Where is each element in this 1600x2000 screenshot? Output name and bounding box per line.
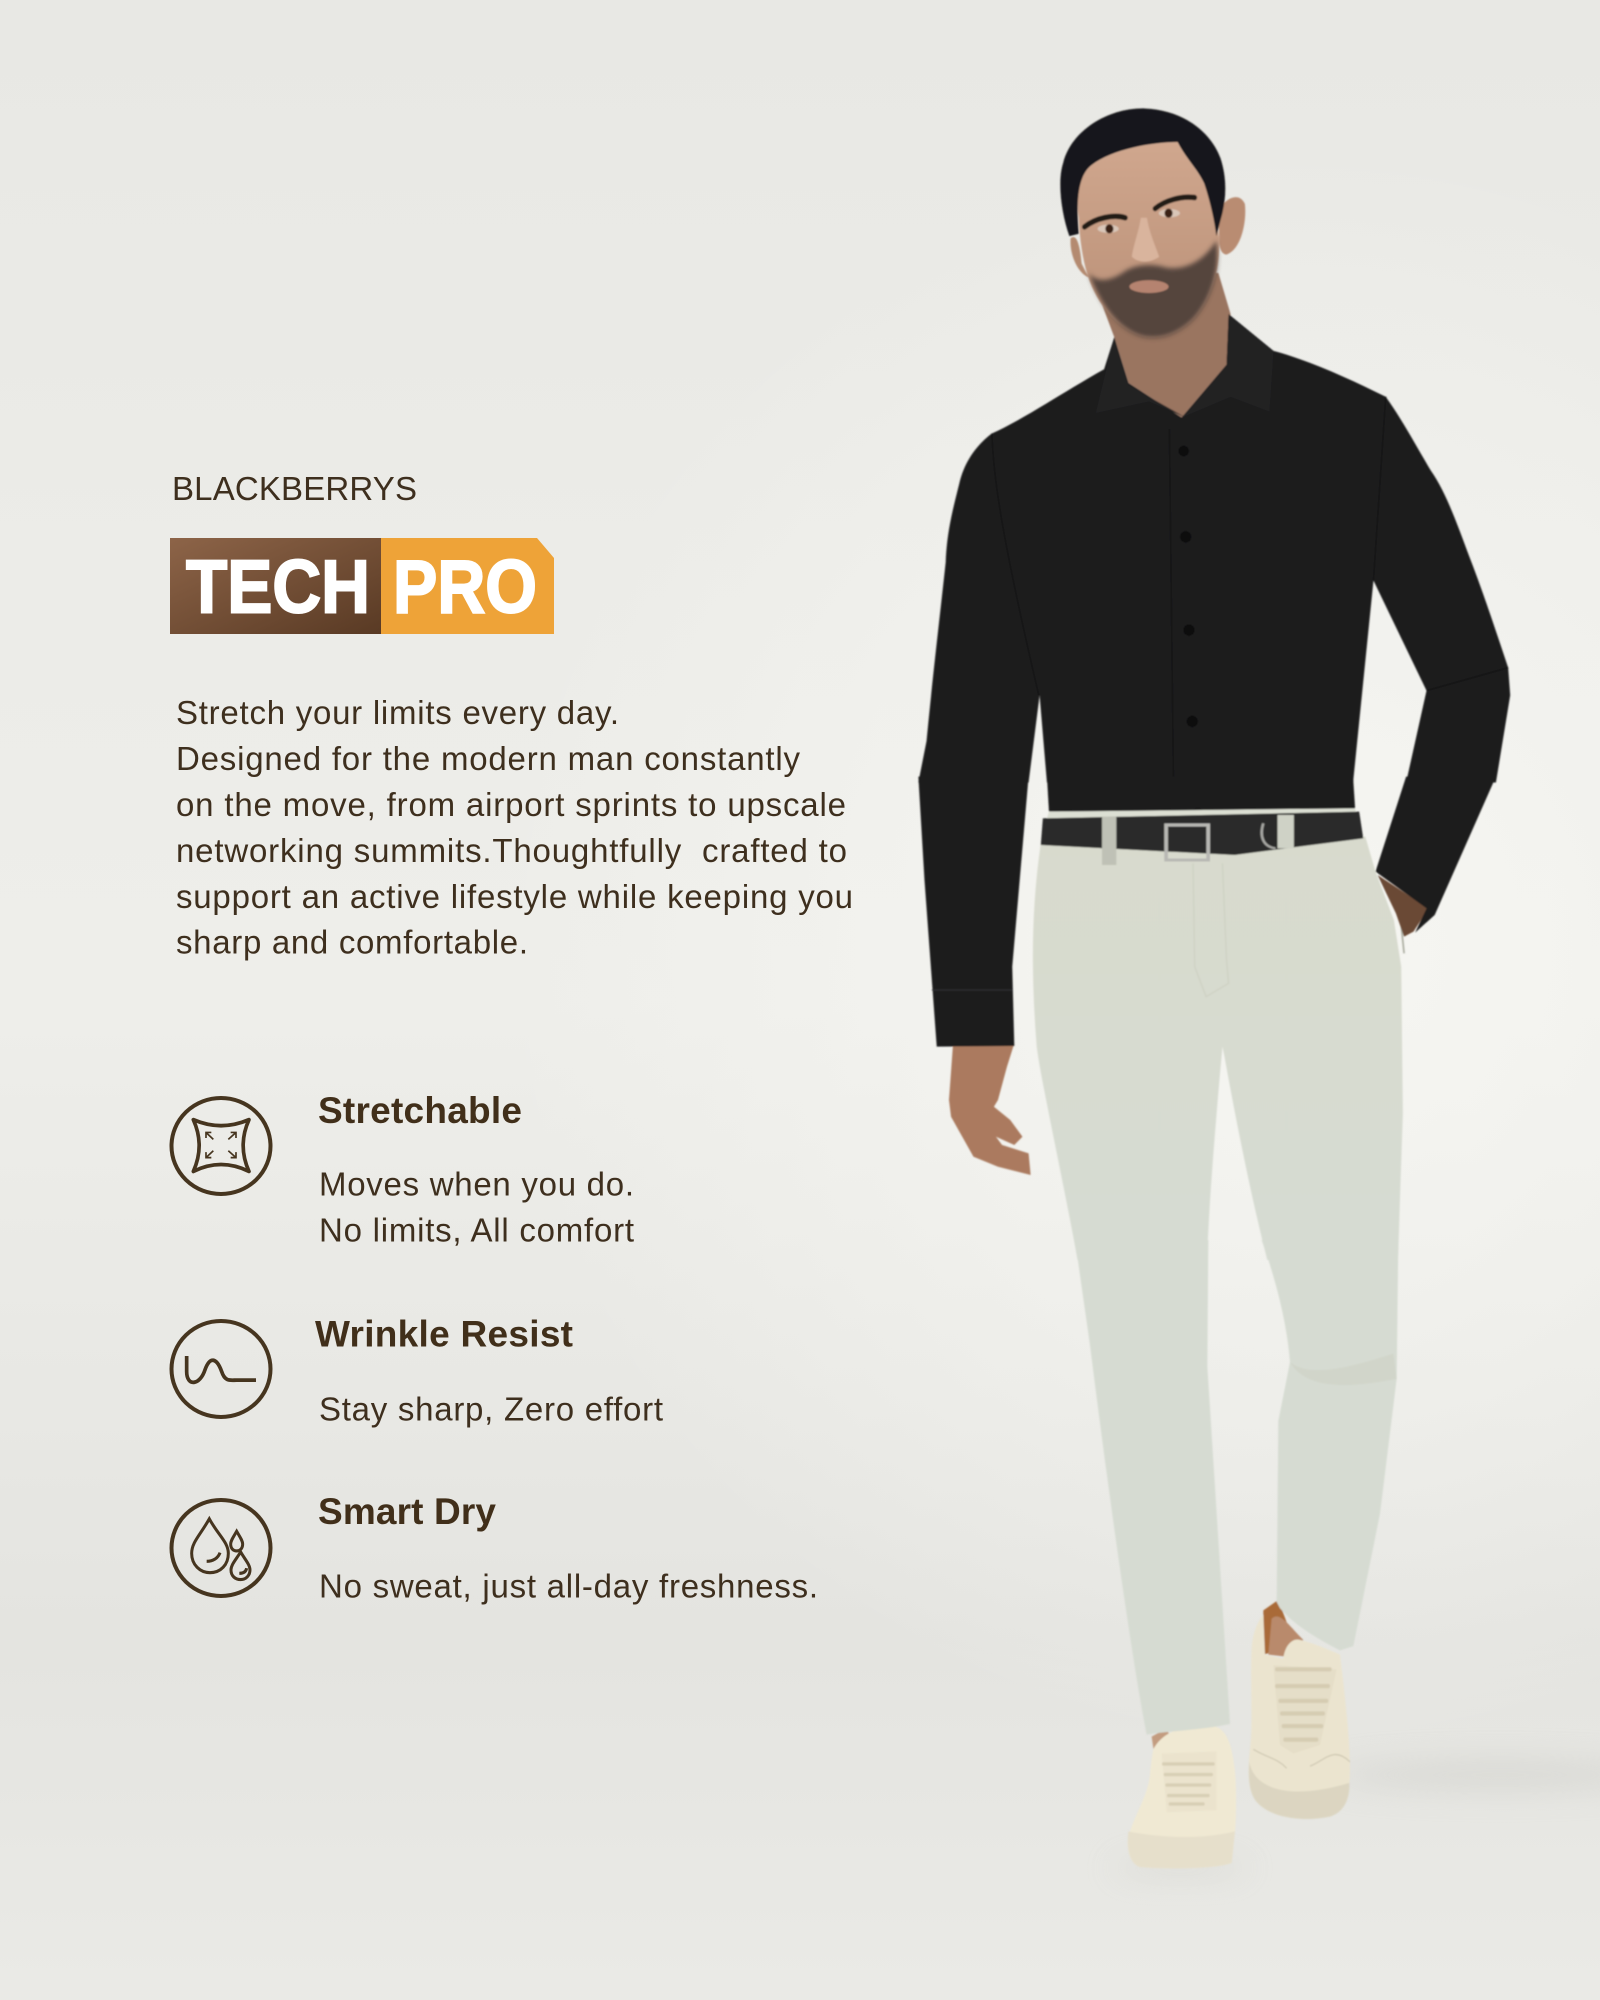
intro paragraph <box>176 694 853 961</box>
heading: Wrinkle Resist: Wrinkle Resist <box>315 1314 573 1354</box>
intro paragraph: Designed for the modern man constantly <box>176 740 800 777</box>
beard <box>1089 241 1218 338</box>
buttons <box>1178 445 1198 727</box>
eyes <box>1098 209 1180 233</box>
shirt <box>918 314 1510 1047</box>
shirt body and sleeves upper <box>918 314 1510 782</box>
feature: stretchable <box>172 1090 634 1249</box>
heading: Stretchable: Stretchable <box>318 1090 522 1131</box>
logo: Tech Pro: PRO <box>393 544 537 628</box>
left shoe <box>1128 1726 1236 1868</box>
shirt hem <box>1047 777 1355 817</box>
face <box>1078 142 1219 338</box>
icon: water drops <box>172 1500 270 1596</box>
ears <box>1218 197 1245 254</box>
intro paragraph: networking summits.Thoughtfully crafted to <box>176 832 847 869</box>
shirt placket <box>992 397 1508 782</box>
intro paragraph: support an active lifestyle while keeping you <box>176 878 853 915</box>
description: wrinkle resist: Stay sharp, Zero effort <box>319 1390 663 1428</box>
feature: smart dry <box>172 1491 818 1604</box>
description: stretchable <box>319 1166 634 1249</box>
model figure <box>918 108 1510 1868</box>
logo: Tech Pro <box>170 538 554 634</box>
left hand <box>949 1043 1031 1175</box>
right hand in pocket <box>1378 875 1429 937</box>
heading: Smart Dry: Smart Dry <box>318 1491 496 1532</box>
neck and head <box>1060 108 1245 417</box>
icon: stretch fabric <box>172 1098 270 1194</box>
description: stretchable: Moves when you do. <box>319 1166 634 1203</box>
nose <box>1132 218 1159 262</box>
collar <box>1096 314 1273 417</box>
feature: wrinkle resist <box>172 1314 663 1428</box>
floor shadows <box>1110 1761 1600 1876</box>
trousers <box>1033 837 1404 1735</box>
right shoe <box>1249 1600 1350 1819</box>
description: smart dry: No sweat, just all-day freshness. <box>319 1568 818 1604</box>
logo: Tech Pro: TECH <box>186 544 370 628</box>
shoes <box>1128 1600 1350 1868</box>
eyebrows <box>1084 197 1195 227</box>
intro paragraph: on the move, from airport sprints to upscale <box>176 786 846 823</box>
hair <box>1060 108 1225 236</box>
intro paragraph: Stretch your limits every day. <box>176 694 619 731</box>
right sleeve and cuff <box>1376 777 1496 933</box>
icon: smooth wave <box>172 1321 270 1417</box>
brand name: BLACKBERRYS <box>172 470 417 507</box>
belt <box>1041 808 1363 865</box>
lips <box>1129 280 1169 293</box>
neck <box>1092 273 1231 417</box>
intro paragraph: sharp and comfortable. <box>176 924 528 961</box>
left sleeve <box>918 777 1029 1047</box>
description: stretchable: No limits, All comfort <box>319 1212 634 1249</box>
